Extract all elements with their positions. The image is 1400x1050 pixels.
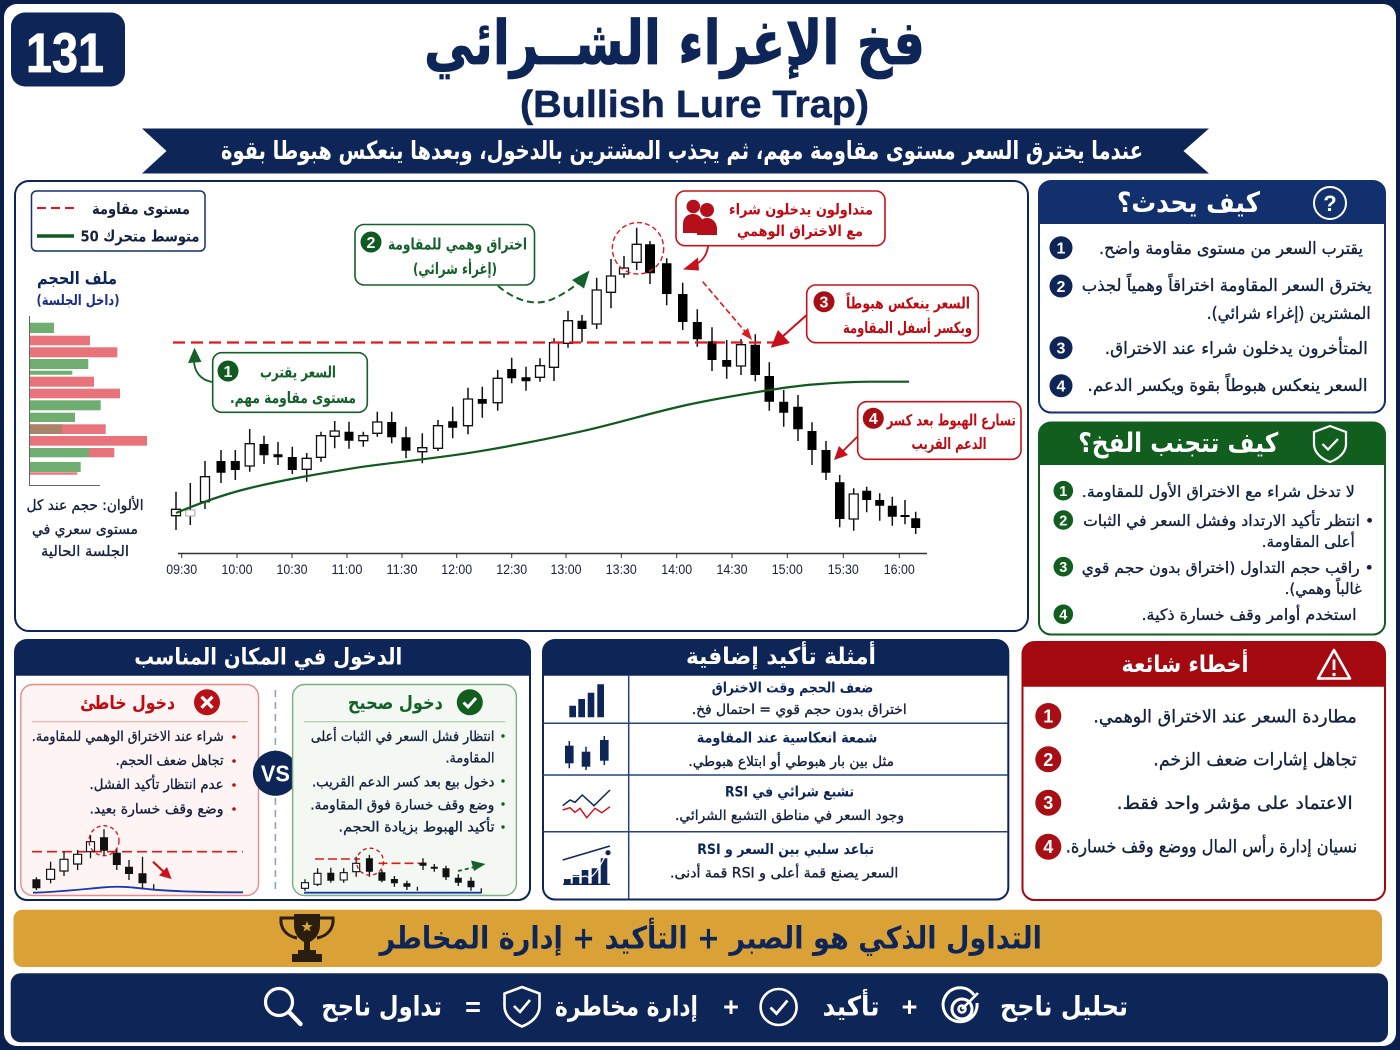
- correct entry list: تأكيد الهبوط بزيادة الحجم.: [338, 817, 495, 836]
- row: reversal candle: مثل بين بار هبوطي أو ابتلاع هبوطي.: [688, 752, 894, 770]
- heading: how it happens: كيف يحدث؟: [1117, 186, 1261, 219]
- volume profile bars: [30, 316, 147, 486]
- legend: متوسط متحرك 50: [81, 228, 200, 246]
- icon: divergence: [563, 846, 611, 884]
- tip 4: استخدم أوامر وقف خسارة ذكية.: [1142, 604, 1356, 625]
- heading: how it happens: [1039, 181, 1385, 224]
- step 4: [1050, 372, 1368, 397]
- wrong entry list: تجاهل ضعف الحجم.: [116, 753, 224, 769]
- mistake 1: مطاردة السعر عند الاختراق الوهمي.: [1093, 706, 1357, 727]
- banner: success formula: إدارة مخاطرة: [555, 992, 698, 1022]
- mistake 4: نسيان إدارة رأس المال ووضع وقف خسارة.: [1066, 834, 1357, 857]
- callout 2: false breakout: [355, 224, 534, 285]
- row: weak volume: اختراق بدون حجم قوي = احتمال فخ.: [692, 702, 907, 718]
- icon: traders: [683, 200, 717, 235]
- arrow: dashed fall from top to resistance: [703, 282, 752, 340]
- row: RSI overbought: [563, 785, 904, 824]
- legend: [32, 191, 205, 251]
- step 2: 2: [1057, 279, 1066, 296]
- step 2: يخترق السعر المقاومة اختراقاً وهمياً لجذب: [1082, 272, 1372, 296]
- icon: volume bars: [569, 684, 604, 717]
- row: weak volume: [569, 681, 907, 718]
- callout 1: price approaches resistance: السعر يقترب: [260, 364, 336, 382]
- time axis: 13:30: [606, 561, 637, 577]
- panel: price chart: [15, 181, 1028, 631]
- callout 2: false breakout: (إغرأء شرائي): [413, 259, 497, 279]
- resistance line: [173, 341, 788, 344]
- title: فخ الإغراء الشــرائي: [424, 8, 925, 80]
- correct entry mini chart: [302, 848, 486, 893]
- tip 1: لا تدخل شراء مع الاختراق الأول للمقاومة.: [1082, 482, 1355, 502]
- step 2: المشترين (إغراء شرائي).: [1207, 304, 1371, 324]
- tip 3: غالباً وهمي).: [1285, 578, 1362, 599]
- heading: common mistakes: [1022, 642, 1385, 687]
- panel: entering at the right place: [15, 640, 530, 900]
- time axis: 10:30: [276, 561, 308, 577]
- volume profile heading: ملف الحجم: [37, 269, 117, 289]
- subtitle ribbon: [142, 128, 1209, 174]
- mistake 3: [1035, 790, 1353, 816]
- mistake 4: 4: [1043, 837, 1053, 857]
- correct entry list: انتظار فشل السعر في الثبات أعلى: [311, 727, 494, 745]
- badge: number 131: 131: [26, 21, 104, 84]
- time axis: [166, 553, 927, 577]
- time axis: 16:00: [884, 561, 915, 577]
- tip 4: 4: [1059, 608, 1067, 624]
- callout 4: accelerating fall: [858, 402, 1021, 459]
- heading: how to avoid: كيف تتجنب الفخ؟: [1078, 428, 1279, 459]
- heading: right entry: الدخول في المكان المناسب: [134, 644, 402, 670]
- tip 2: أعلى المقاومة.: [1262, 531, 1355, 552]
- title: (Bullish Lure Trap): [520, 84, 869, 126]
- panel: additional confirmation examples: [543, 640, 1008, 900]
- banner: success formula: [11, 973, 1388, 1042]
- step 3: المتأخرون يدخلون شراء عند الاختراق.: [1105, 336, 1368, 359]
- banner: success formula: تحليل ناجح: [1000, 992, 1128, 1022]
- step 4: السعر ينعكس هبوطاً بقوة ويكسر الدعم.: [1088, 372, 1368, 396]
- callout 2: false breakout: اختراق وهمي للمقاومة: [388, 236, 527, 254]
- callout 3: reversal: ويكسر أسفل المقاومة: [843, 318, 972, 337]
- dashed circle: breakout top: [612, 223, 664, 274]
- icon: RSI lines: [563, 790, 610, 818]
- correct entry card: دخول صحيح: [348, 693, 443, 714]
- wrong entry card: [21, 684, 258, 896]
- row: weak volume: ضعف الحجم وقت الاختراق: [712, 681, 873, 697]
- banner: success formula: =: [465, 992, 481, 1022]
- row: reversal candle: [565, 731, 894, 770]
- banner: success formula: تأكيد: [822, 988, 880, 1022]
- callout: traders buy: [676, 191, 885, 246]
- time axis: 15:00: [772, 561, 803, 577]
- tip 1: 1: [1059, 484, 1067, 500]
- tip 3: 3: [1059, 560, 1067, 576]
- correct entry list: [310, 727, 505, 836]
- correct entry list: وضع وقف خسارة فوق المقاومة.: [310, 797, 494, 813]
- banner: smart trading: [14, 910, 1382, 967]
- wrong entry list: [32, 729, 236, 817]
- heading: how to avoid: [1039, 422, 1385, 465]
- callout 4: accelerating fall: تسارع الهبوط بعد كسر: [886, 412, 1016, 430]
- banner: success formula: +: [723, 992, 739, 1022]
- wrong entry list: وضع وقف خسارة بعيد.: [90, 801, 224, 817]
- title: [424, 8, 925, 126]
- heading: how it happens: ?: [1323, 191, 1337, 216]
- arrow: traders callout to top: [683, 246, 708, 270]
- panel: common mistakes: [1022, 642, 1385, 900]
- callout 1: price approaches resistance: مستوى مقاومة مهم.: [230, 389, 356, 407]
- correct entry list: دخول بيع بعد كسر الدعم القريب.: [312, 775, 494, 791]
- volume profile heading: (داخل الجلسة): [36, 293, 120, 309]
- mistake 1: 1: [1043, 706, 1053, 726]
- mistake 2: تجاهل إشارات ضعف الزخم.: [1153, 750, 1357, 771]
- callout 1: price approaches resistance: 1: [224, 364, 233, 381]
- time axis: 11:30: [386, 561, 418, 577]
- callout 3: reversal: [807, 285, 978, 343]
- step 4: 4: [1057, 378, 1066, 396]
- panel: how to avoid the trap: [1039, 422, 1385, 634]
- time axis: 09:30: [166, 561, 197, 577]
- time axis: 14:00: [661, 561, 692, 577]
- VS divider: VS: [261, 760, 290, 786]
- legend: مستوى مقاومة: [92, 200, 190, 218]
- heading: examples: [543, 640, 1008, 676]
- banner: smart trading: التداول الذكي هو الصبر + التأكيد + إدارة المخاطر: [378, 918, 1042, 956]
- icon: target: [943, 988, 978, 1022]
- icon: shield: [504, 987, 540, 1026]
- callout 2: false breakout: 2: [367, 235, 376, 252]
- moving average line: [176, 382, 909, 513]
- row: RSI overbought: تشبع شرائي في RSI: [725, 785, 854, 801]
- subtitle ribbon: عندما يخترق السعر مستوى مقاومة مهم، ثم يجذب المشترين بالدخول، وبعدها ينعكس هبوطا بقوة: [221, 136, 1143, 166]
- time axis: 12:30: [496, 561, 527, 577]
- time axis: 14:30: [716, 561, 748, 577]
- time axis: 15:30: [828, 561, 859, 577]
- callout 4: accelerating fall: 4: [869, 411, 878, 428]
- tip 4: [1054, 604, 1356, 625]
- callout 3: reversal: السعر ينعكس هبوطاً: [846, 292, 970, 312]
- icon: magnifier: [266, 988, 300, 1024]
- time axis: 10:00: [222, 561, 253, 577]
- wrong entry list: عدم انتظار تأكيد الفشل.: [90, 774, 224, 793]
- mistake 2: 2: [1043, 750, 1053, 770]
- banner: success formula: +: [902, 992, 917, 1022]
- VS divider: [253, 690, 298, 893]
- tip 2: [1054, 510, 1374, 552]
- arrow: callout 3 to resistance: [771, 315, 807, 348]
- mistake 4: [1035, 834, 1357, 860]
- icon: check circle: [761, 989, 797, 1025]
- arrow: callout 1 to resistance: [188, 348, 212, 382]
- wrong entry list: شراء عند الاختراق الوهمي للمقاومة.: [32, 729, 224, 745]
- step 2: [1050, 272, 1372, 324]
- arrow: callout 2 to breakout: [498, 270, 590, 302]
- correct entry card: [293, 684, 516, 896]
- candlestick chart: [172, 228, 920, 534]
- wrong entry mini chart: [32, 826, 243, 893]
- arrow: callout 4 to price: [834, 437, 857, 460]
- heading: examples: أمثلة تأكيد إضافية: [686, 640, 876, 670]
- callout 1: price approaches resistance: [213, 353, 367, 412]
- tip 3: [1054, 557, 1374, 599]
- step 1: 1: [1057, 240, 1066, 258]
- volume profile caption: مستوى سعري في: [32, 522, 138, 538]
- time axis: 12:00: [441, 561, 472, 577]
- mistake 1: [1035, 703, 1357, 729]
- step 3: 3: [1057, 340, 1066, 358]
- row: RSI overbought: وجود السعر في مناطق التشبع الشرائي.: [675, 808, 904, 824]
- correct entry list: المقاومة.: [446, 751, 494, 767]
- mistake 3: الاعتماد على مؤشر واحد فقط.: [1117, 793, 1353, 814]
- icon: trophy: [281, 914, 333, 962]
- panel: how it happens: [1039, 181, 1385, 412]
- tip 3: • راقب حجم التداول (اختراق بدون حجم قوي: [1082, 559, 1374, 578]
- badge: number 131: [11, 12, 125, 86]
- mistake 3: 3: [1043, 793, 1053, 813]
- volume profile heading: [36, 269, 120, 309]
- volume profile caption: الجلسة الحالية: [41, 544, 129, 560]
- time axis: 13:00: [550, 561, 582, 577]
- heading: common mistakes: أخطاء شائعة: [1122, 648, 1248, 678]
- callout 3: reversal: 3: [820, 294, 829, 312]
- heading: right entry: [15, 640, 530, 676]
- tip 2: 2: [1059, 513, 1067, 529]
- banner: success formula: تداول ناجح: [321, 992, 442, 1022]
- tip 2: • انتظر تأكيد الارتداد وفشل السعر في الثبات: [1083, 510, 1374, 531]
- callout: traders buy: مع الاختراق الوهمي: [737, 222, 863, 240]
- volume profile caption: الألوان: حجم عند كل: [26, 496, 144, 514]
- row: RSI divergence: السعر يصنع قمة أعلى و RSI قمة أدنى.: [670, 863, 898, 881]
- callout: traders buy: متداولون يدخلون شراء: [729, 200, 873, 218]
- volume profile caption: [26, 496, 144, 560]
- wrong entry card: دخول خاطئ: [80, 693, 175, 714]
- row: reversal candle: شمعة انعكاسية عند المقاومة: [697, 731, 877, 747]
- row: RSI divergence: تباعد سلبي بين السعر و RSI: [697, 842, 874, 858]
- icon: candles: [565, 736, 609, 770]
- mistake 2: [1035, 746, 1357, 772]
- time axis: 11:00: [332, 561, 363, 577]
- step 1: يقترب السعر من مستوى مقاومة واضح.: [1099, 239, 1363, 259]
- row: RSI divergence: [563, 842, 898, 884]
- callout 4: accelerating fall: الدعم القريب: [912, 435, 986, 453]
